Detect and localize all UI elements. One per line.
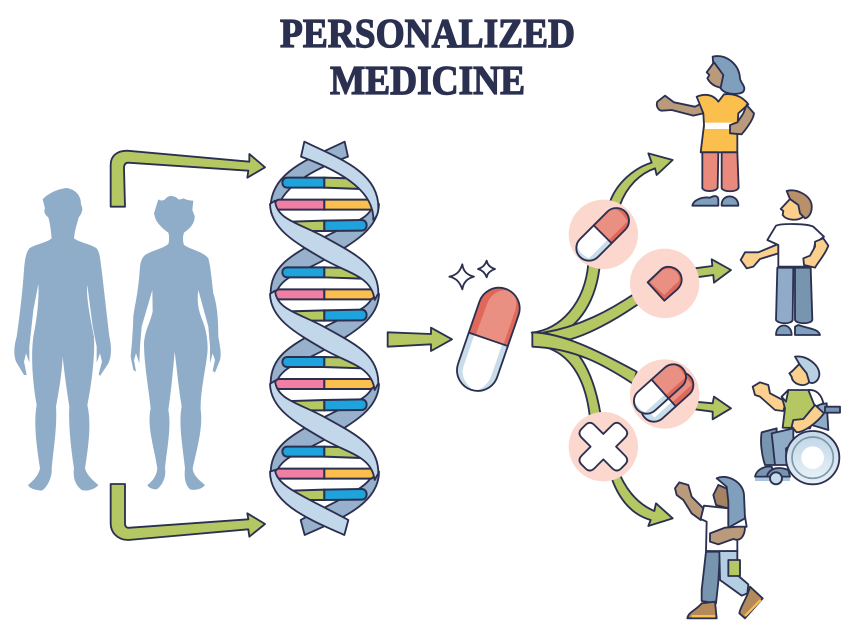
circle: double pills — [629, 359, 699, 429]
icon: sparkles — [449, 261, 495, 289]
branch: upper middle — [543, 293, 639, 339]
branch: lower middle — [532, 332, 637, 384]
arrow: bottom bent arrow to DNA — [111, 484, 265, 540]
circle: half pill — [630, 249, 699, 318]
arrow: top bent arrow to DNA — [111, 151, 265, 207]
arrow: upper middle tip — [695, 259, 731, 283]
person: wheelchair user — [753, 356, 840, 484]
back strand — [271, 142, 379, 535]
arrow: DNA to pill — [388, 328, 452, 351]
title — [280, 10, 575, 103]
title: PERSONALIZED — [280, 10, 575, 56]
branch: down — [540, 344, 601, 418]
icon: large capsule — [451, 282, 525, 396]
DNA double helix — [270, 142, 379, 535]
branching treatment arrows — [532, 153, 731, 526]
person: walking woman — [675, 477, 763, 618]
arrow: bottom tip — [612, 475, 673, 526]
front strand — [270, 142, 378, 535]
arrow: lower middle tip — [695, 397, 731, 419]
circle: whole pill — [569, 200, 638, 269]
branch: up — [532, 263, 600, 337]
person: man in white shirt — [741, 190, 828, 335]
silhouette: woman — [131, 196, 221, 490]
base pairs — [275, 178, 374, 500]
person: woman in yellow shirt — [657, 56, 754, 206]
title: MEDICINE — [330, 57, 525, 103]
silhouette: man — [14, 188, 111, 491]
arrow: top tip — [610, 153, 673, 205]
circle: cross — [564, 407, 643, 486]
